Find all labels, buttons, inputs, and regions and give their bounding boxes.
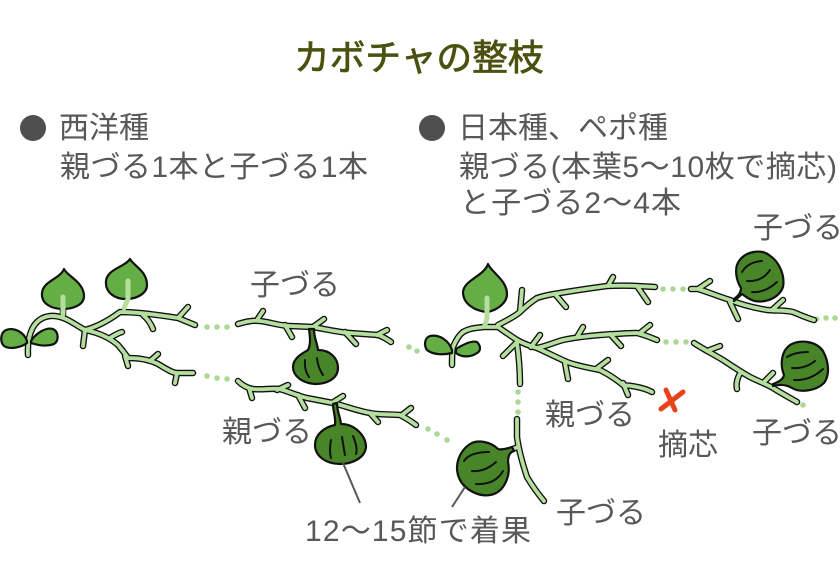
- icon: true leaf: [463, 264, 507, 325]
- icon: pinch mark: [661, 390, 683, 410]
- text: Japanese pepo title: 日本種、ペポ種: [458, 112, 668, 145]
- icon: pumpkin middle: [773, 342, 828, 391]
- icon: true leaf 1: [42, 269, 84, 314]
- bullet: [20, 115, 46, 141]
- dots: shoot continuation: [204, 324, 450, 443]
- icon: cotyledon left: [425, 336, 452, 354]
- vine: upper child shoot: [691, 281, 814, 320]
- icon: cotyledon right: [456, 342, 480, 356]
- text: Japanese pepo description line 2: と子づる2〜4本: [460, 187, 681, 220]
- icon: cotyledon left: [1, 329, 27, 348]
- vine: seedling with two shoots: [28, 305, 195, 383]
- text: Western squash description: 親づる1本と子づる1本: [60, 151, 368, 184]
- vine: seedling with branching shoots: [452, 277, 657, 395]
- vine: parent shoot: [238, 381, 416, 425]
- icon: pumpkin on parent shoot: [315, 403, 366, 464]
- leader line: [343, 463, 360, 503]
- icon: pumpkin upper: [734, 252, 783, 301]
- text: Western squash title: 西洋種: [59, 112, 149, 145]
- label: parent shoot left: 親づる: [222, 416, 312, 449]
- vine: middle child shoot: [694, 343, 797, 402]
- vine: child shoot: [238, 311, 391, 344]
- icon: pumpkin lower: [457, 442, 514, 495]
- label: child shoot left: 子づる: [250, 269, 340, 302]
- label: parent shoot right: 親づる: [545, 399, 635, 432]
- vine: lower child shoot: [510, 419, 544, 501]
- icon: cotyledon right: [31, 329, 58, 346]
- icon: true leaf 2: [106, 259, 147, 308]
- label: pinching: 摘芯: [658, 429, 718, 462]
- label: child shoot mid right: 子づる: [752, 417, 840, 450]
- panel: Japanese and pepo squash heading: [419, 112, 837, 220]
- title: カボチャの整枝: [294, 38, 543, 78]
- label: fruit set: 12〜15節で着果: [305, 515, 531, 548]
- dots: shoot continuation: [515, 286, 838, 415]
- bullet: [419, 115, 445, 141]
- diagram: Western squash plant: [1, 259, 450, 503]
- label: child shoot bottom: 子づる: [556, 497, 646, 530]
- leader line: [452, 487, 465, 507]
- panel: Western squash heading: [20, 112, 368, 184]
- diagram: Japanese and pepo squash plant: [425, 252, 838, 507]
- text: Japanese pepo description line 1: 親づる(本葉5〜10枚で摘芯): [459, 151, 837, 184]
- icon: pumpkin on child shoot: [293, 329, 338, 384]
